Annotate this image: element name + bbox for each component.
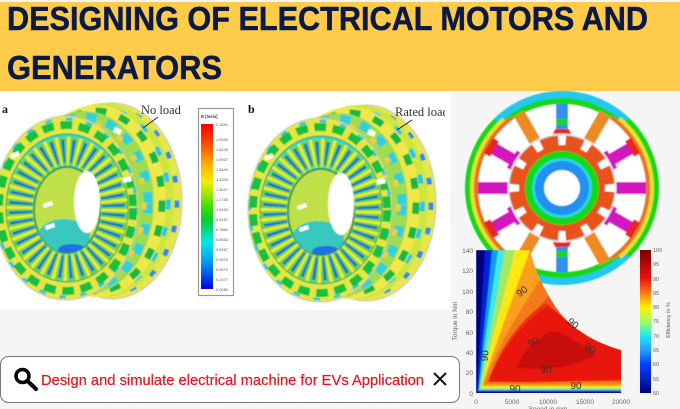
efficiency colorbar: 80	[653, 305, 659, 311]
y axis ticks: 80	[466, 309, 473, 316]
efficiency colorbar: 65	[653, 348, 659, 354]
flux density legend: 0.2673	[216, 267, 228, 272]
torus a: no load	[0, 103, 182, 300]
efficiency colorbar: 50	[653, 391, 659, 397]
y axis ticks: 120	[462, 268, 473, 275]
flux density legend: 0.6563	[216, 237, 228, 242]
flux density legend: 0.3970	[216, 257, 229, 262]
flux density legend: B [tesla]	[201, 114, 218, 119]
efficiency colorbar: 55	[653, 377, 659, 383]
torus b: rated load	[248, 105, 436, 302]
contour labels: 90	[480, 349, 492, 362]
contour labels: 90	[570, 381, 582, 392]
efficiency colorbar: 100	[653, 248, 662, 254]
contour labels: 90	[527, 335, 542, 350]
flux density legend: 1.1750	[216, 197, 229, 202]
y axis ticks: 40	[466, 350, 473, 357]
flux density legend: 1.0453	[216, 207, 228, 212]
title	[7, 0, 648, 86]
efficiency colorbar: 85	[653, 291, 659, 297]
x axis ticks	[474, 399, 630, 406]
efficiency contour map	[476, 250, 622, 394]
x axis ticks: 5000	[505, 399, 520, 406]
flux density legend: 0.7860	[216, 227, 229, 232]
efficiency colorbar: 95	[653, 262, 659, 268]
contour labels: 90	[565, 316, 581, 332]
efficiency colorbar	[640, 248, 672, 397]
y axis ticks: 0	[469, 391, 473, 398]
contour labels: 90	[540, 365, 552, 376]
contour labels: 90	[515, 284, 531, 300]
contour labels	[480, 284, 598, 395]
panel label a: a	[2, 102, 8, 116]
no load callout: No load	[141, 103, 182, 117]
contour labels: 90	[582, 341, 598, 357]
y axis ticks	[462, 248, 473, 398]
y axis ticks: 100	[462, 289, 473, 296]
flux density legend: 1.9530	[216, 137, 229, 142]
icon: close	[434, 373, 446, 385]
y axis ticks: 140	[462, 248, 473, 255]
flux density legend: 0.9157	[216, 217, 228, 222]
flux density legend: 1.4343	[216, 177, 228, 182]
stator spokes	[478, 104, 646, 272]
flux density legend: 2.1691	[216, 122, 228, 127]
efficiency colorbar: 70	[653, 334, 659, 340]
x axis ticks: 20000	[612, 399, 630, 406]
panel label b: b	[248, 102, 255, 116]
x axis ticks: 10000	[539, 399, 557, 406]
rated load callout: Rated load	[395, 105, 450, 119]
efficiency colorbar: 90	[653, 277, 659, 283]
efficiency colorbar: 75	[653, 319, 659, 325]
peak efficiency region	[517, 332, 594, 369]
flux density legend: 1.3047	[216, 187, 228, 192]
title: DESIGNING OF ELECTRICAL MOTORS AND	[7, 0, 648, 37]
y axis title: Torque in Nm	[452, 302, 459, 340]
flux density legend: 0.1377	[216, 277, 228, 282]
flux density legend	[198, 108, 234, 296]
search bar: Design and simulate electrical machine for EVs Application	[41, 373, 424, 389]
efficiency colorbar: 60	[653, 362, 659, 368]
x axis ticks: 15000	[576, 399, 594, 406]
search bar	[0, 356, 460, 402]
flux density legend: 1.6937	[216, 157, 228, 162]
rated load callout	[395, 108, 445, 130]
efficiency colorbar: Efficiency in %	[666, 302, 672, 338]
stator and rotor cross-section	[465, 91, 659, 285]
title: GENERATORS	[7, 49, 222, 86]
y axis ticks: 20	[466, 370, 473, 377]
y axis ticks: 60	[466, 330, 473, 337]
flux density legend: 1.5640	[216, 167, 229, 172]
flux density legend: 0.0080	[216, 287, 229, 292]
no load callout	[141, 103, 182, 128]
image panel background	[0, 92, 450, 310]
contour labels: 90	[509, 384, 521, 395]
x axis ticks: 0	[474, 399, 478, 406]
flux density legend: 0.5267	[216, 247, 228, 252]
title band	[0, 2, 680, 91]
icon: magnifier	[16, 370, 36, 389]
flux density legend: 1.8233	[216, 147, 228, 152]
